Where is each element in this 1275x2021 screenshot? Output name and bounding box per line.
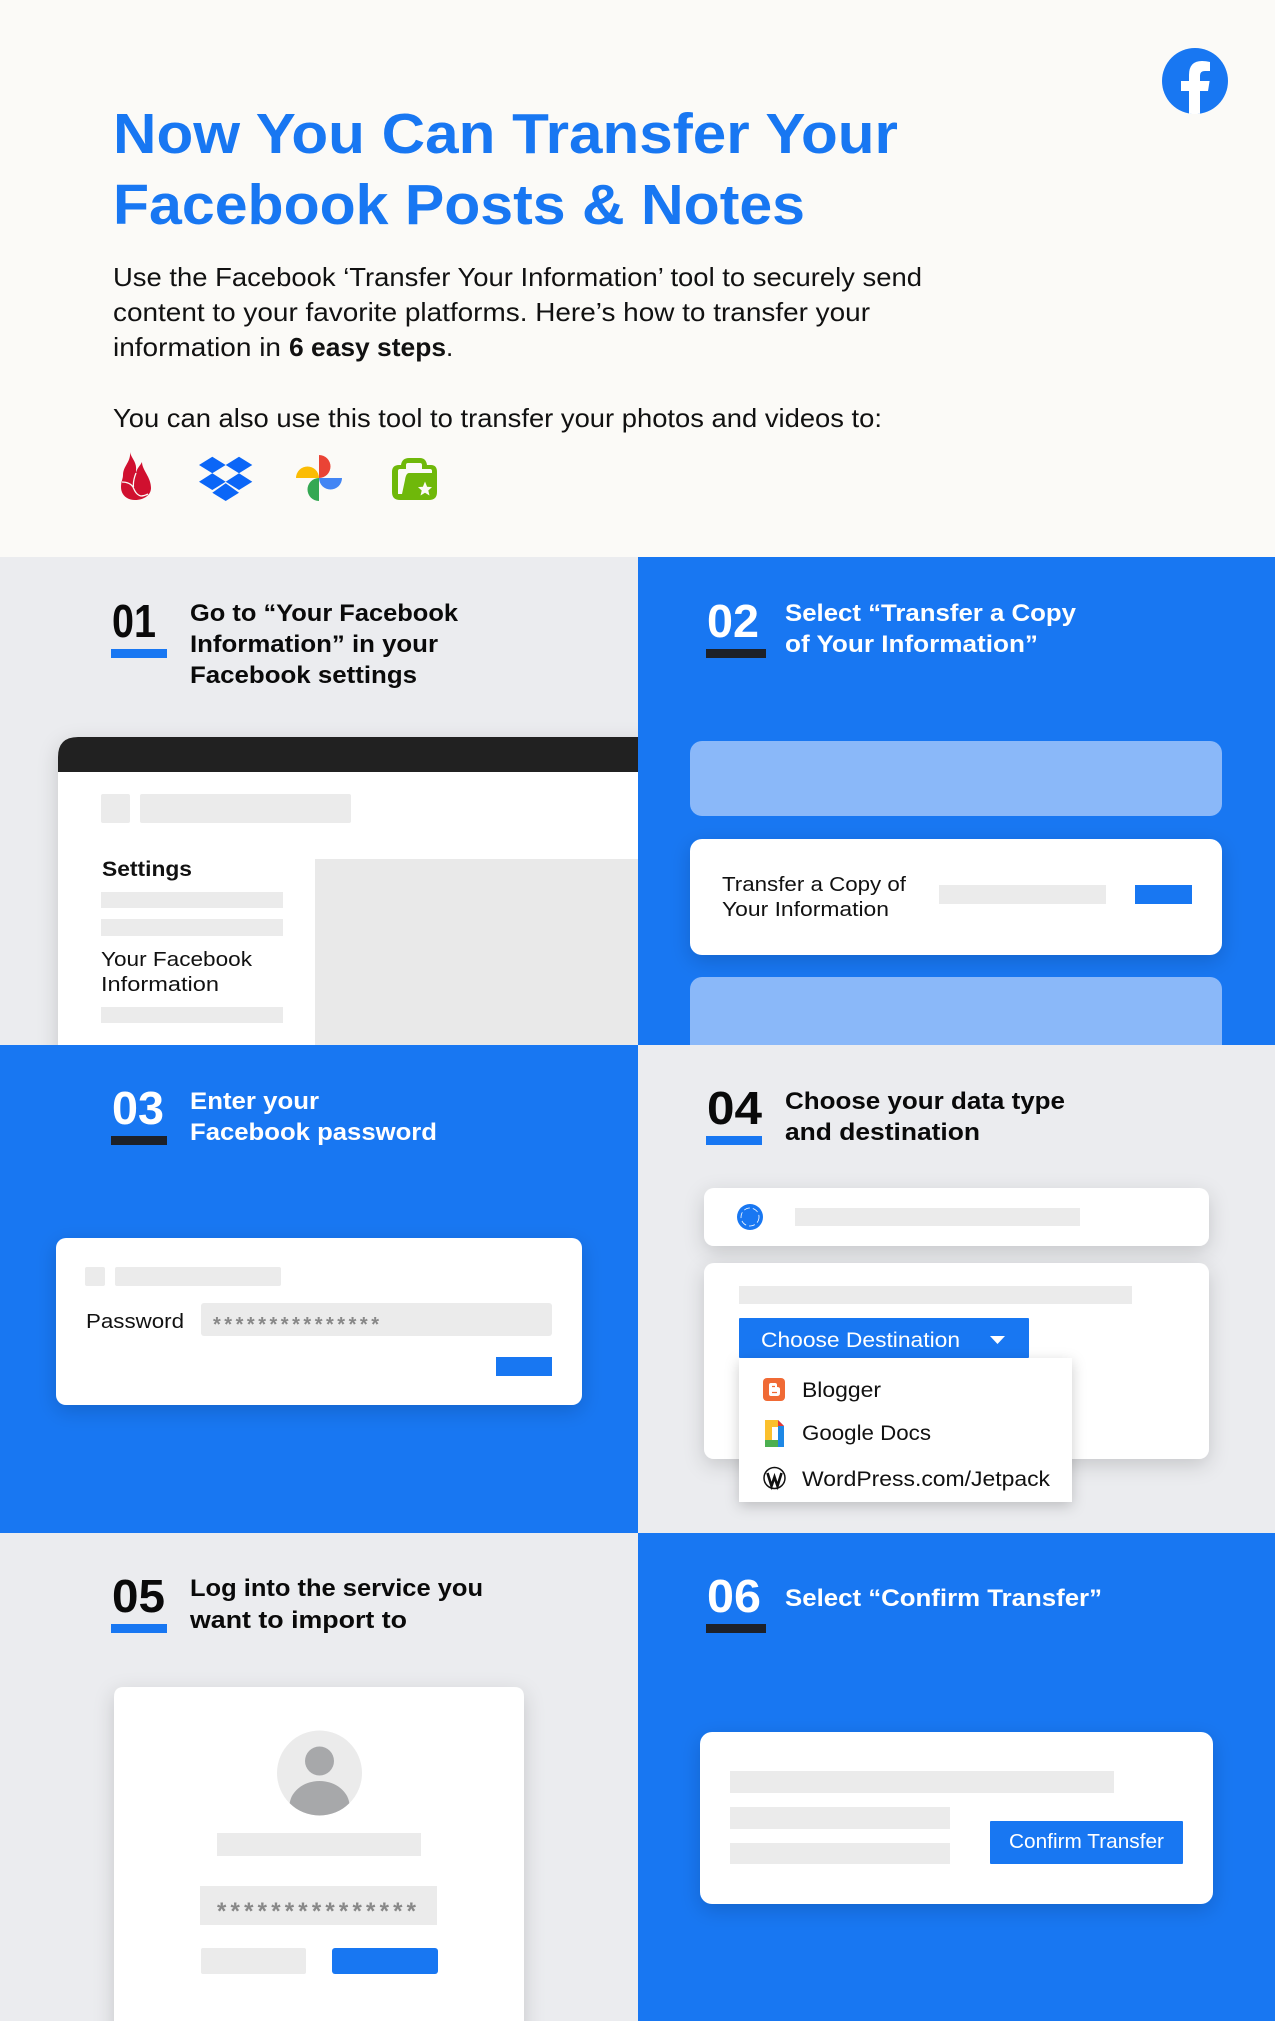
browser window mockup: Information [101,974,219,996]
browser window mockup: Your Facebook [101,949,253,971]
panel: step 4 [638,1045,1275,1533]
login card: *************** [217,1898,417,1925]
WordPress label: WordPress.com/Jetpack [802,1468,1051,1491]
step 3 heading: Facebook password [190,1119,437,1146]
step 1 number: 01 [112,595,156,647]
step 5 heading: Log into the service you [190,1575,483,1602]
step 4 bar [706,1136,762,1145]
step 6 heading: Select “Confirm Transfer” [785,1585,1102,1612]
destination card [704,1263,1209,1459]
settings rows mockup [690,741,1222,1067]
step 4 number: 04 [707,1082,762,1134]
step 2 heading: Select “Transfer a Copy [785,600,1077,627]
icon: Facebook logo [1162,48,1228,114]
step 4 heading [785,1088,1065,1146]
icon: SmugMug folder [392,458,437,500]
step 1 heading [190,600,459,689]
settings rows mockup: Transfer a Copy of [722,874,906,896]
icon: WordPress [764,1468,785,1488]
header background [0,0,1275,557]
step 4 heading: and destination [785,1119,980,1146]
confirm transfer button: Confirm Transfer [1009,1831,1164,1853]
step 1 bar [111,649,167,658]
photos and videos text: You can also use this tool to transfer your photos and videos to: [113,403,882,433]
step 1 heading: Go to “Your Facebook [190,600,459,627]
intro text: 6 easy steps [289,332,446,362]
step 1 heading: Facebook settings [190,662,417,689]
step 2 heading: of Your Information” [785,631,1038,658]
step 3 number: 03 [112,1082,164,1134]
browser window mockup [58,737,660,1060]
intro text: . [446,332,453,362]
password card [56,1238,582,1405]
intro text: information in [113,332,281,362]
icon: Blogger [763,1378,785,1401]
step 3 heading: Enter your [190,1088,319,1115]
intro text: Use the Facebook ‘Transfer Your Information’ tool to securely send [113,262,922,292]
step 5 bar [111,1624,167,1633]
icon: Google Docs [765,1420,784,1447]
panel: step 5 [0,1533,638,2021]
step 5 number: 05 [112,1570,165,1622]
login card [114,1687,524,2021]
panel: step 6 [638,1533,1275,2021]
step 4 heading: Choose your data type [785,1088,1065,1115]
panel: step 3 [0,1045,638,1533]
step 2 heading [785,600,1077,658]
Google Docs label: Google Docs [802,1422,931,1445]
step 5 heading: want to import to [189,1607,407,1634]
confirm card [700,1732,1213,1904]
Blogger label: Blogger [802,1379,881,1402]
step 3 heading [190,1088,437,1146]
choose destination button [739,1318,1029,1358]
step 6 number: 06 [707,1570,761,1622]
step 6 bar [706,1624,766,1633]
intro text: content to your favorite platforms. Here’s how to transfer your [113,297,870,327]
title: Now You Can Transfer Your [113,102,898,166]
password card: *************** [213,1314,379,1336]
panel: step 1 [0,557,660,1060]
title: Facebook Posts & Notes [113,173,805,237]
icon: Backblaze flame [121,452,151,500]
title [113,102,898,237]
step 1 heading: Information” in your [190,631,438,658]
confirm transfer button [990,1821,1183,1864]
icon: Dropbox [199,457,252,501]
destination dropdown [739,1358,1072,1502]
password card: Password [86,1311,184,1333]
step 5 heading [189,1575,483,1634]
intro text [113,262,922,362]
avatar [277,1730,362,1816]
step 3 bar [111,1136,167,1145]
panel: step 2 [638,557,1275,1067]
browser window mockup: Settings [102,858,192,881]
step 2 number: 02 [707,595,759,647]
choose destination button: Choose Destination [761,1329,960,1352]
settings rows mockup: Your Information [722,899,889,921]
step 2 bar [706,649,766,658]
data type card [704,1188,1209,1246]
icon: Google Photos pinwheel [296,455,342,501]
